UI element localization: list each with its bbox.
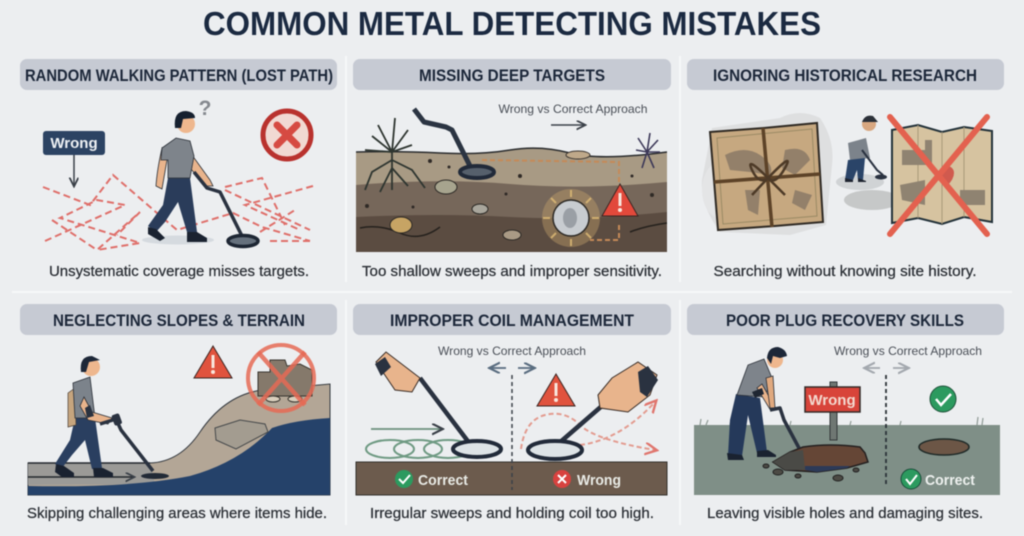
heading: improper coil management: IMPROPER COIL MANAGEMENT <box>390 311 635 330</box>
correct tag <box>901 469 975 489</box>
small digging person <box>836 116 900 210</box>
walking person with detector: ? <box>199 97 211 120</box>
person with detector on flat ground <box>55 356 169 479</box>
heading: ignoring historical research: IGNORING HISTORICAL RESEARCH <box>713 66 977 85</box>
icon: warning triangle <box>602 184 638 216</box>
approach label: Wrong vs Correct Approach <box>498 102 648 116</box>
icon: green check <box>930 386 956 412</box>
grass with roots <box>365 118 425 192</box>
digging person with detector <box>727 347 799 460</box>
crossed-out ruins <box>248 345 314 411</box>
approach label with arrows: Wrong vs Correct Approach <box>438 344 586 358</box>
heading: random walking pattern <box>20 59 337 90</box>
panel: ignoring historical research <box>687 59 1004 280</box>
caption: Skipping challenging areas where items hide. <box>27 505 327 522</box>
icon: red cross circle <box>263 111 311 159</box>
walking person with detector <box>142 97 258 246</box>
caption: Searching without knowing site history. <box>714 263 976 280</box>
glowing coin <box>542 189 600 247</box>
caption: Irregular sweeps and holding coil too high. <box>370 505 654 522</box>
correct tag <box>395 470 468 489</box>
heading: poor plug recovery skills <box>687 304 1004 335</box>
panel: improper coil management <box>353 304 671 522</box>
dashed random path <box>43 175 313 250</box>
panel: random walking pattern <box>20 59 337 280</box>
sign: wrong: Wrong <box>808 392 856 409</box>
wrong tag: Wrong <box>577 472 621 489</box>
wrong tag <box>553 470 621 489</box>
heading: neglecting slopes and terrain: NEGLECTING SLOPES & TERRAIN <box>53 311 305 330</box>
heading: neglecting slopes and terrain <box>20 304 337 335</box>
neat plug outline <box>919 439 969 455</box>
heading: missing deep targets: MISSING DEEP TARGETS <box>419 66 605 85</box>
messy dug hole <box>763 445 868 481</box>
divider <box>511 375 513 490</box>
crossed-out modern map <box>890 117 992 234</box>
correct tag: Correct <box>925 472 975 489</box>
caption: Leaving visible holes and damaging sites. <box>707 505 983 522</box>
correct sweep <box>366 352 501 458</box>
heading: improper coil management <box>353 304 671 335</box>
ground strip <box>356 462 667 495</box>
icon: warning triangle <box>537 374 575 406</box>
wrong label with arrow <box>43 131 105 185</box>
panel: missing deep targets <box>353 59 671 280</box>
wrong sweep <box>521 362 658 459</box>
icon: warning triangle <box>194 346 232 378</box>
divider <box>885 375 887 487</box>
correct tag: Correct <box>418 472 468 489</box>
purple plant <box>636 133 660 168</box>
sign: wrong <box>805 382 860 440</box>
detector sweeping shallow <box>414 109 494 178</box>
title: COMMON METAL DETECTING MISTAKES <box>203 5 821 42</box>
tied old map <box>702 113 832 235</box>
heading: ignoring historical research <box>687 59 1004 90</box>
grass ground <box>694 417 1000 495</box>
dashed signal path <box>482 160 619 240</box>
heading: poor plug recovery skills: POOR PLUG RECOVERY SKILLS <box>726 311 964 330</box>
panel: neglecting slopes and terrain <box>20 304 337 522</box>
slope terrain <box>28 384 330 495</box>
heading: random walking pattern: RANDOM WALKING PATTERN (LOST PATH) <box>25 66 333 85</box>
caption: Unsystematic coverage misses targets. <box>49 263 309 280</box>
caption: Too shallow sweeps and improper sensitivity. <box>362 263 662 280</box>
soil cross-section <box>356 148 667 252</box>
panel: poor plug recovery skills <box>687 304 1004 522</box>
wrong label with arrow: Wrong <box>50 135 98 152</box>
heading: missing deep targets <box>353 59 671 90</box>
approach label with arrows: Wrong vs Correct Approach <box>834 344 982 358</box>
